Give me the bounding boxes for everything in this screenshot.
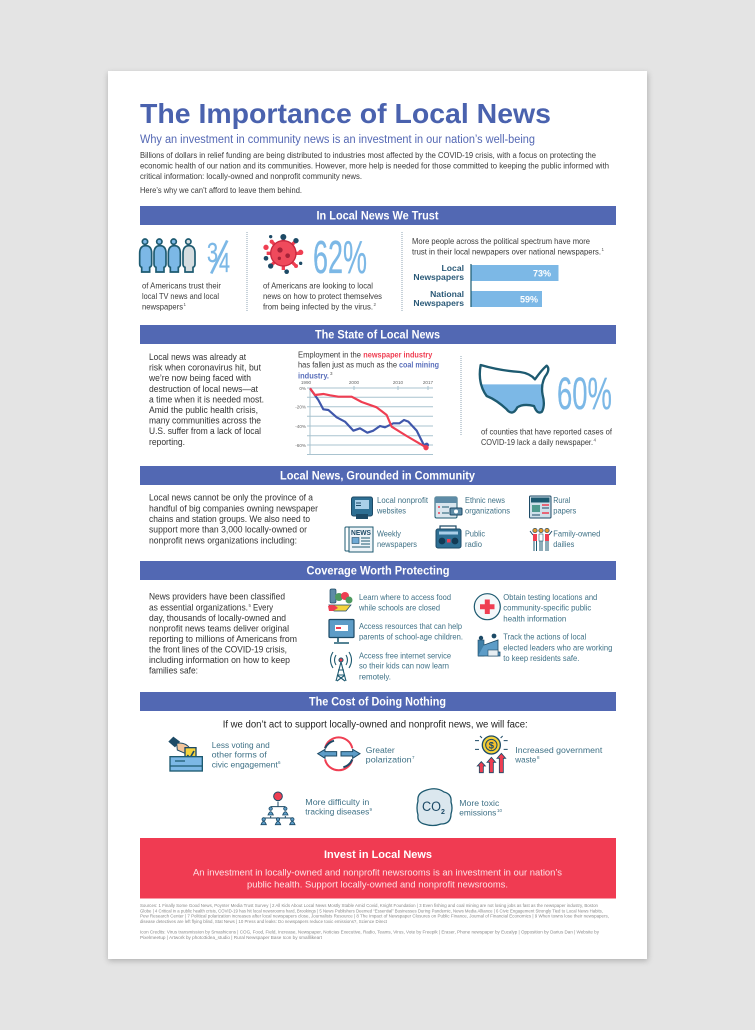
section heading bar	[140, 561, 616, 580]
label: toxic emissions: More toxic	[459, 798, 500, 808]
body text: families safe:	[149, 666, 198, 676]
icon: ballot box	[168, 737, 202, 771]
body text: risk when coronavirus hit, but	[149, 363, 261, 373]
line chart: employment decline: -40%	[295, 424, 306, 429]
body text: nonprofit news teams deliver original	[149, 623, 289, 633]
text: political spectrum trust	[412, 236, 604, 256]
label: tracking diseases: 9	[370, 807, 372, 812]
callout: invest in local news	[140, 838, 616, 898]
line chart: employment decline: 2000	[349, 380, 360, 385]
body text: Amid the public health crisis,	[149, 405, 258, 415]
label: toxic emissions	[459, 798, 503, 818]
bar chart: local vs national newspapers: 73%	[533, 268, 551, 278]
icon: weekly newspaper: NEWS	[351, 530, 371, 537]
text: three quarters: of Americans trust their	[142, 280, 221, 290]
text: political spectrum trust: 1	[602, 247, 604, 252]
intro text: economic health of our nation and its communities. However, more help is needed for those committed to keeping the public informed with	[140, 160, 609, 170]
label: ethnic news organizations: organizations	[465, 506, 510, 516]
label: greater polarization: Greater	[366, 745, 395, 755]
body text: including information on how to keep	[149, 655, 290, 665]
label: tracking diseases	[305, 797, 372, 816]
body text: as essential organizations.	[149, 602, 248, 612]
icon: disease tracking tree	[261, 792, 295, 825]
label: resources: parents of school-age children.	[359, 632, 463, 642]
stat: three quarters: 3	[207, 237, 218, 268]
label: rural papers: Rural	[553, 495, 570, 505]
label: toxic emissions: emissions	[459, 808, 496, 818]
label: resources: Access resources that can help	[359, 621, 462, 631]
body text: Local news cannot be only the province of a	[149, 493, 314, 503]
text: political spectrum trust: More people across the political spectrum have more	[412, 236, 590, 246]
section heading bar: The State of Local News	[315, 330, 440, 342]
sources	[140, 903, 609, 924]
icon: government waste: $	[489, 740, 495, 750]
body text: U.S. suffer from a lack of local	[149, 426, 261, 436]
label: ethnic news organizations	[465, 495, 510, 516]
text: 60 percent: of counties that have reported cases of	[481, 426, 613, 436]
label: food: Learn where to access food	[359, 592, 451, 602]
title: The Importance of Local News	[140, 98, 551, 129]
label: weekly newspapers	[377, 528, 417, 549]
label: internet service: so their kids can now learn	[359, 661, 449, 671]
body text: reporting to millions of Americans from	[149, 634, 297, 644]
poster page	[108, 71, 647, 959]
chart caption: 3	[330, 371, 333, 376]
label: family-owned dailies	[553, 528, 600, 549]
label: tracking diseases: tracking diseases	[305, 806, 369, 816]
lead sentence: If we don’t act to support locally-owned and nonprofit news, we will face:	[223, 720, 528, 730]
bar chart: local vs national newspapers: Newspapers	[413, 298, 464, 308]
label: weekly newspapers: Weekly	[377, 528, 402, 538]
label: greater polarization	[366, 745, 415, 764]
bar chart: local vs national newspapers	[413, 263, 558, 308]
body text: destruction of local news—at	[149, 384, 258, 394]
label: weekly newspapers: newspapers	[377, 539, 417, 549]
label: government waste: 8	[537, 755, 540, 760]
icon: US map half filled	[480, 365, 548, 413]
label: ethnic news organizations: Ethnic news	[465, 495, 505, 505]
label: food: while schools are closed	[358, 603, 440, 613]
line chart: employment decline: 0%	[299, 386, 306, 391]
line chart: employment decline: -60%	[295, 443, 306, 448]
icon: government waste	[475, 736, 508, 773]
label: testing locations: community-specific public	[503, 603, 592, 613]
sources: Globe | 4 Critical in a public health crisis, COVID-19 has hit local newsrooms hard, Brookings | 5 News Publishers Deemed “Essential” Businesses During Pandemic, News Media Alliance | 6 Civic Engagement Strongly Tied to Local News Habits,	[140, 908, 603, 913]
section heading bar	[140, 466, 616, 485]
label: less voting: other forms of	[212, 750, 267, 760]
label: less voting	[212, 740, 281, 770]
label: government waste: waste	[514, 754, 537, 764]
label: elected leaders: to keep residents safe.	[503, 653, 579, 663]
line chart: employment decline: 1990	[301, 380, 312, 385]
bar chart: local vs national newspapers: 59%	[520, 294, 538, 304]
body text	[149, 592, 297, 676]
label: testing locations: Obtain testing locations and	[503, 592, 597, 602]
icon: polarization arrows	[318, 737, 360, 770]
panel: coverage worth protecting	[140, 561, 616, 681]
label: rural papers: papers	[553, 506, 576, 516]
body text: News providers have been classified	[149, 592, 285, 602]
icon: website	[352, 497, 372, 519]
label: government waste: Increased government	[515, 745, 603, 755]
line chart: employment decline: -20%	[295, 404, 306, 410]
label: internet service: Access free internet service	[359, 650, 451, 660]
label: testing locations	[503, 592, 597, 623]
icon: elected leaders	[478, 634, 500, 656]
label: greater polarization: 7	[412, 755, 415, 760]
icon: CO2 cloud: 2	[441, 809, 445, 816]
body text: reporting.	[149, 437, 185, 447]
chart caption	[298, 349, 439, 380]
text: three quarters	[142, 280, 221, 312]
line chart: employment decline	[295, 380, 434, 455]
icon: weekly newspaper	[345, 527, 373, 552]
text: 62 percent	[263, 280, 382, 312]
stat: 60 percent: 60%	[557, 368, 612, 419]
label: elected leaders	[503, 632, 612, 663]
body text: nonprofit news organizations including:	[149, 535, 297, 545]
label: family-owned dailies: Family-owned	[553, 528, 600, 538]
bar chart: local vs national newspapers: Newspapers	[413, 272, 464, 282]
body text: 5	[248, 603, 252, 608]
section heading bar: The Cost of Doing Nothing	[309, 696, 446, 708]
icon: food	[328, 589, 352, 611]
body text	[149, 493, 318, 545]
body text: many communities across the	[149, 416, 261, 426]
icon: family	[530, 528, 552, 551]
intro text: critical information: locally-owned and nonprofit community news.	[140, 171, 362, 181]
panel: state of local news	[140, 325, 616, 455]
icon: computer	[329, 620, 354, 643]
sources: disease detectives are left flying blind, Stat News | 10 Press and leaks: Do newspapers reduce toxic emissions?, Science Direct	[140, 919, 388, 924]
icon credits: Icon Credits: Virus transmission by Smashicons | COG, Food, Field, Increase, Newspaper, Noticias Executive, Radio, Teams, Virus, Vote by Freepik | Eraser, Phone newspaper by Eucalyp | Opposition by Darius Dan | Website by	[140, 930, 600, 935]
panel: cost of doing nothing	[140, 692, 616, 826]
body text: handful of big companies owning newspaper	[149, 503, 318, 513]
label: testing locations: health information	[503, 613, 566, 623]
label: greater polarization: polarization	[366, 754, 412, 764]
icon: virus	[263, 234, 303, 274]
icon: rural papers	[530, 496, 551, 518]
sources: Pew Research Center | 7 Political polarization increases after local newspapers close, Journalists Resource | 8 The Impact of Newspaper Closures on Public Finance, Journal of Financial Economics | 9 When towns lose their newspapers,	[140, 914, 609, 919]
line chart: employment decline: 2017	[423, 380, 434, 385]
line chart: employment decline: 2010	[393, 380, 404, 385]
icon: CO2 cloud	[417, 789, 452, 826]
label: internet service	[359, 650, 451, 681]
text: three quarters: newspapers	[142, 302, 183, 312]
intro text: Here’s why we can’t afford to leave them behind.	[140, 185, 302, 195]
body text: chains and station groups. We also need to	[149, 514, 310, 524]
body text: we’re now being faced with	[148, 373, 251, 383]
label: rural papers	[553, 495, 576, 516]
subtitle: Why an investment in community news is an investment in our nation’s well-being	[140, 134, 535, 146]
label: local nonprofit websites: Local nonprofit	[377, 495, 429, 505]
section heading bar: Local News, Grounded in Community	[280, 470, 476, 482]
dotted dividers	[247, 232, 402, 311]
text: 60 percent	[481, 426, 613, 447]
label: government waste	[514, 745, 603, 764]
icon: radio tower	[330, 652, 352, 681]
intro text: Billions of dollars in relief funding are being distributed to industries most affected by the COVID-19 crisis, with a focus on protecting the	[140, 150, 596, 160]
section heading bar	[140, 206, 616, 225]
body text	[148, 352, 264, 447]
icon: medical cross	[474, 594, 500, 620]
text: political spectrum trust: trust in their local newpapers over national newspapers.	[412, 246, 601, 256]
label: local nonprofit websites: websites	[376, 506, 406, 516]
label: toxic emissions: 10	[497, 808, 503, 813]
stat: 62 percent: 62%	[313, 231, 367, 283]
label: public radio	[465, 528, 486, 549]
section heading bar	[140, 325, 616, 344]
label: public radio: radio	[465, 539, 482, 549]
section heading bar: Coverage Worth Protecting	[306, 566, 450, 578]
body text: support more than 3,000 locally-owned or	[149, 525, 307, 535]
label: less voting: Less voting and	[212, 740, 270, 750]
callout: invest in local news: Invest in Local News	[324, 849, 432, 861]
panel: in local news we trust	[140, 206, 616, 312]
dotted divider	[460, 356, 462, 436]
label: public radio: Public	[465, 528, 486, 538]
label: family-owned dailies: dailies	[553, 539, 574, 549]
label: tracking diseases: More difficulty in	[305, 797, 370, 807]
text: three quarters: local TV news and local	[142, 291, 219, 301]
body text: Local news was already at	[149, 352, 246, 362]
label: elected leaders: Track the actions of local	[503, 632, 586, 642]
section heading bar	[140, 692, 616, 711]
intro text	[140, 150, 609, 195]
icon credits: Pixelmeetup | Artwork by photo3idea_studio | Rural Newspaper Base Icon by smalllikeart	[140, 935, 323, 940]
label: elected leaders: elected leaders who are working	[503, 642, 612, 652]
callout: invest in local news: An investment in locally-owned and nonprofit newsrooms is an investment in our nation’s	[193, 868, 562, 878]
label: local nonprofit websites	[376, 495, 429, 516]
text: 62 percent: from being infected by the virus.	[263, 302, 373, 312]
label: less voting: civic engagement	[212, 760, 278, 770]
text: 60 percent: COVID-19 lack a daily newspaper.	[481, 437, 593, 447]
bar chart: local vs national newspapers: National	[430, 289, 464, 299]
stat: three quarters	[207, 237, 230, 278]
body text: a time when it is needed most.	[149, 394, 264, 404]
icon: ethnic news	[435, 497, 462, 518]
text: 62 percent: 2	[374, 302, 376, 307]
text: 62 percent: news on how to protect themselves	[263, 291, 382, 301]
chart caption: Employment in the	[298, 349, 361, 359]
icon: CO2 cloud: CO	[422, 799, 441, 814]
callout: invest in local news: public health. Support locally-owned and nonprofit newsrooms.	[247, 880, 508, 890]
label: internet service: remotely.	[359, 671, 391, 681]
text: three quarters: 1	[184, 302, 186, 307]
stat: three quarters: 4	[219, 247, 230, 278]
label: food	[358, 592, 451, 613]
body text: Every	[253, 602, 273, 612]
icon credits	[140, 930, 600, 940]
text: 62 percent: of Americans are looking to local	[263, 280, 373, 290]
panel: grounded in community	[140, 466, 616, 552]
sources: Sources: 1 Finally Some Good News, Poynter Media Trust Survey | 2 All Kids About Local News Mostly Stable Amid Covid, Knight Foundation | 3 Even fishing and coal mining are not losing jobs as fast as the newspaper industry, Boston	[140, 903, 598, 908]
chart caption: has fallen just as much as the	[298, 360, 397, 370]
icon: radio	[436, 526, 461, 548]
body text: day, thousands of locally-owned and	[149, 613, 286, 623]
section heading bar: In Local News We Trust	[316, 210, 439, 222]
bar chart: local vs national newspapers: Local	[442, 263, 464, 273]
icon: four people, three filled	[140, 239, 195, 272]
chart caption: coal mining	[399, 360, 439, 370]
chart caption: industry.	[298, 370, 329, 380]
label: resources	[359, 621, 463, 642]
text: 60 percent: 4	[594, 438, 596, 442]
body text: the front lines of the COVID-19 crisis,	[149, 645, 287, 655]
label: less voting: 6	[278, 760, 281, 765]
chart caption: newspaper industry	[363, 349, 432, 359]
